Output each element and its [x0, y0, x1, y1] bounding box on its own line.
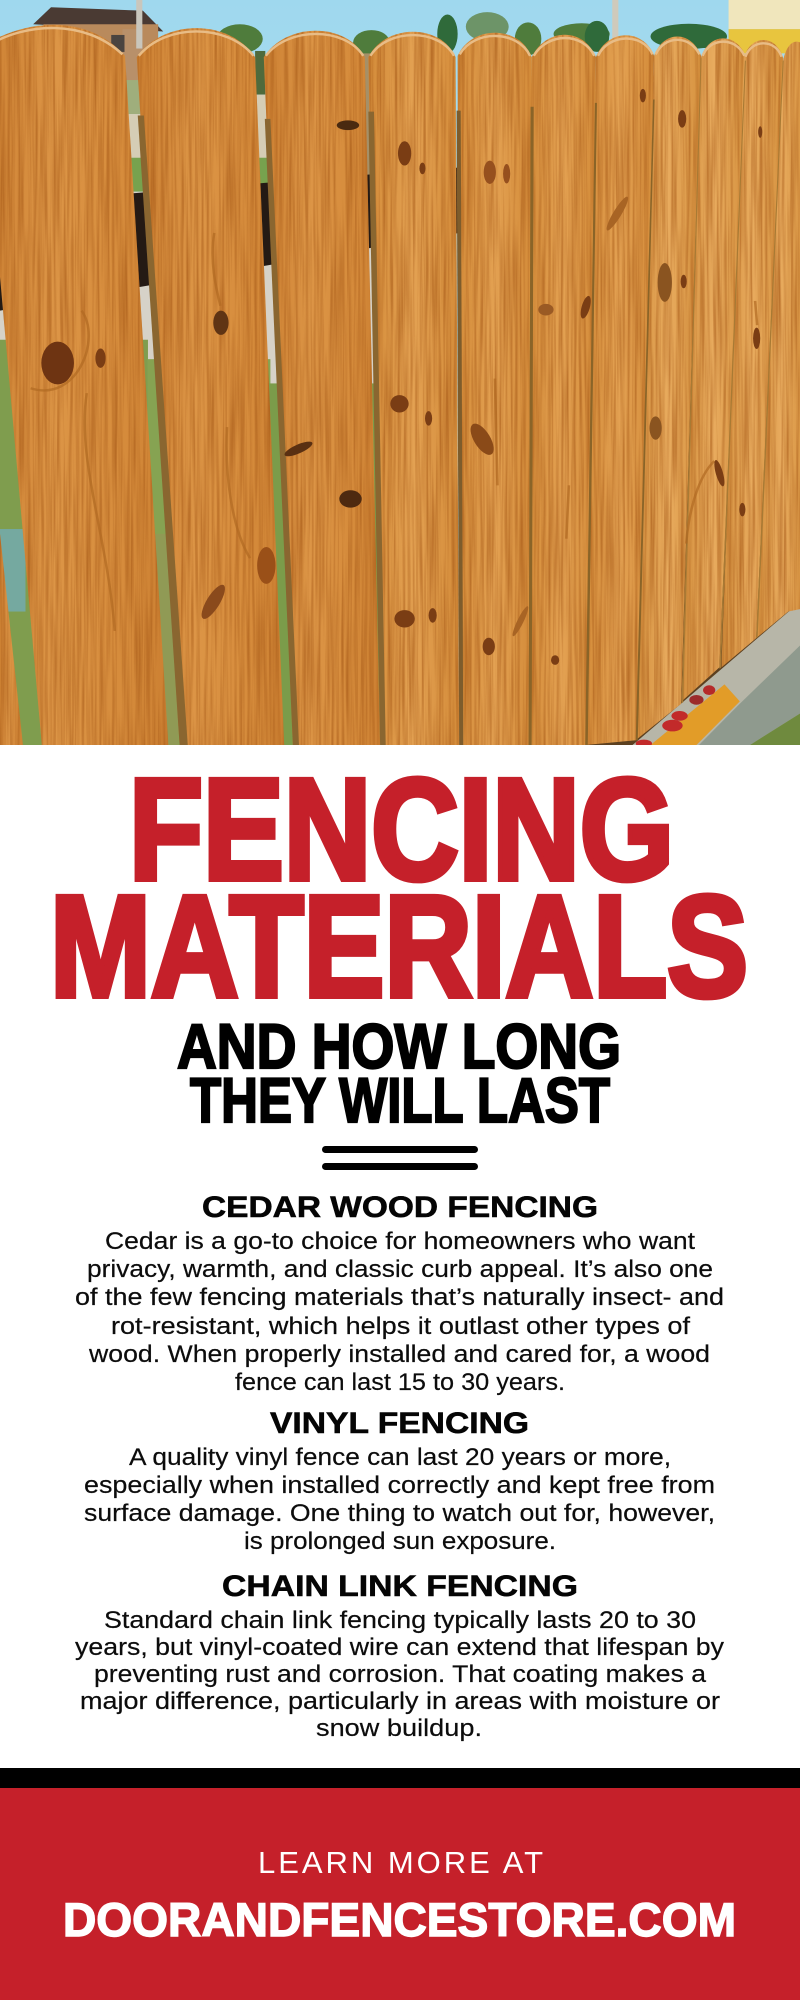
body text: vinyl: surface damage. One thing to watch out for, however, [84, 1500, 715, 1527]
title line: Fencing: FENCING [129, 749, 674, 910]
footer panel [0, 1788, 800, 2000]
subtitle line 1: AND HOW LONG [177, 1012, 621, 1082]
section: cedar wood fencing [75, 1191, 724, 1396]
heading: chain link fencing: CHAIN LINK FENCING [222, 1570, 578, 1603]
body text: vinyl: especially when installed correctly and kept free from [84, 1472, 715, 1499]
body text: chain link [75, 1607, 724, 1742]
heading: cedar wood fencing: CEDAR WOOD FENCING [202, 1191, 598, 1224]
body text: cedar: wood. When properly installed and cared for, a wood [88, 1341, 710, 1368]
photo: wooden fence [0, 0, 800, 745]
concrete footing and orange board [633, 602, 800, 747]
body text: cedar: privacy, warmth, and classic curb appeal. It’s also one [87, 1256, 713, 1283]
subtitle line 2: THEY WILL LAST [190, 1066, 610, 1136]
body text: cedar: fence can last 15 to 30 years. [235, 1369, 565, 1396]
black band [0, 1768, 800, 1788]
wood knots [41, 89, 762, 665]
subtitle: And how long they will last [177, 1012, 621, 1136]
body text: vinyl: A quality vinyl fence can last 20 years or more, [129, 1444, 671, 1471]
plank side edges [138, 58, 784, 745]
title: Fencing Materials [50, 749, 748, 1027]
footer text: learn more at: LEARN MORE AT [258, 1845, 543, 1880]
body text: vinyl [84, 1444, 715, 1555]
body text: cedar: rot-resistant, which helps it outlast other types of [111, 1313, 690, 1340]
section: chain link fencing [75, 1570, 724, 1742]
photo background: sky, house, trees, grass [0, 0, 800, 745]
body text: vinyl: is prolonged sun exposure. [244, 1528, 556, 1555]
section: vinyl fencing [84, 1407, 715, 1555]
wood grain flames [31, 233, 757, 631]
plank rounded top highlights [0, 28, 782, 57]
body text: cedar [75, 1228, 724, 1396]
footer text: website: DOORANDFENCESTORE.COM [63, 1893, 736, 1946]
fence planks [0, 25, 800, 745]
heading: vinyl fencing: VINYL FENCING [270, 1407, 529, 1440]
backing visible between right planks [526, 58, 800, 745]
body text: chain link: Standard chain link fencing typically lasts 20 to 30 [104, 1607, 696, 1634]
double line divider [322, 1146, 478, 1170]
body text: chain link: preventing rust and corrosion. That coating makes a [94, 1661, 707, 1688]
body text: chain link: snow buildup. [316, 1715, 482, 1742]
body text: cedar: of the few fencing materials that’s naturally insect- and [75, 1284, 724, 1311]
body text: chain link: major difference, particularly in areas with moisture or [80, 1688, 720, 1715]
body text: cedar: Cedar is a go-to choice for homeowners who want [105, 1228, 695, 1255]
body text: chain link: years, but vinyl-coated wire can extend that lifespan by [75, 1634, 724, 1661]
